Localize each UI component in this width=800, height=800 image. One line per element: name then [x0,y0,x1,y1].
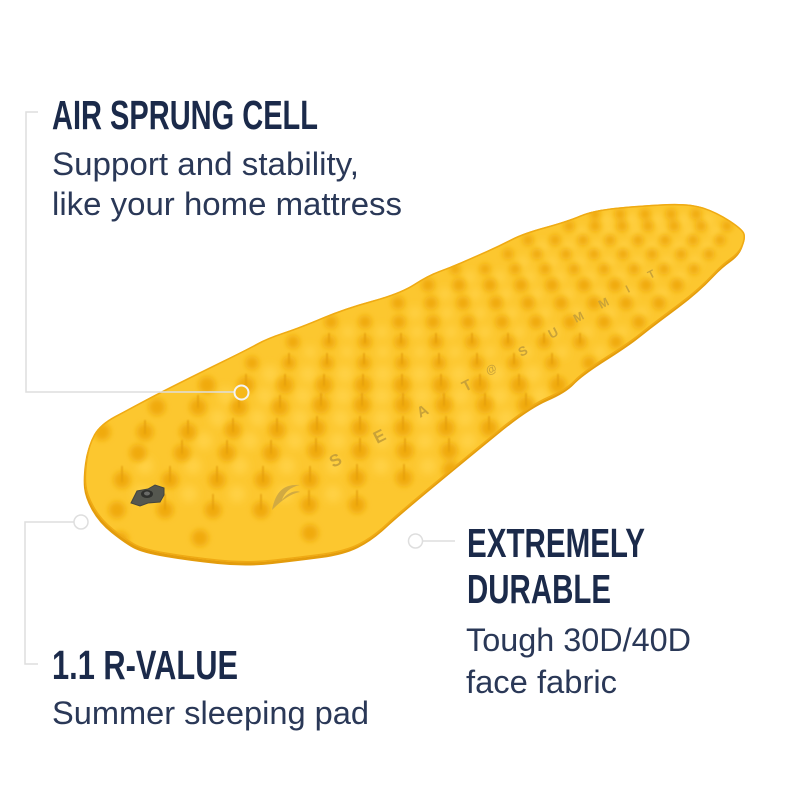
callout: durable text [466,520,691,700]
brand text printed on pad: S [326,449,345,472]
callout: air sprung cell text [52,92,402,222]
pad underside [84,207,744,566]
brand text printed on pad: I [624,284,632,296]
brand text printed on pad: U [546,324,561,342]
pad edge shading [85,204,745,562]
text: support and stability: Support and stability, [52,146,359,182]
cell highlights [141,220,716,494]
text: summer sleeping pad: Summer sleeping pad [52,695,369,731]
brand text printed on pad: E [370,425,389,448]
brand text printed on pad: M [596,295,611,312]
heading: air sprung cell: AIR SPRUNG CELL [52,92,318,138]
heading: extremely: EXTREMELY [467,520,645,566]
callout: r-value leader [25,515,88,664]
text: face fabric: face fabric [466,664,617,700]
callout: durable leader [408,534,455,548]
brand text printed on pad: T [459,376,475,396]
callout: air sprung cell leader [26,112,248,400]
sleeping pad [84,204,745,566]
callout: r-value text [52,642,369,731]
heading: r-value: 1.1 R-VALUE [52,642,238,688]
pad top surface [85,204,745,562]
dimple seams [122,333,580,510]
brand text printed on pad: A [414,401,432,422]
brand text printed on pad: S [516,342,530,360]
text: like your home mattress: like your home mattress [52,186,402,222]
cell dimples [102,214,727,540]
heading: durable: DURABLE [467,566,611,612]
text: tough fabric: Tough 30D/40D [466,622,691,658]
brand text printed on pad: M [571,309,586,326]
brand text printed on pad: @ [484,362,499,378]
brand text printed on pad [326,268,658,472]
icon: air valve [131,485,164,506]
brand text printed on pad: T [646,268,658,282]
icon: brand swoosh [272,485,300,510]
